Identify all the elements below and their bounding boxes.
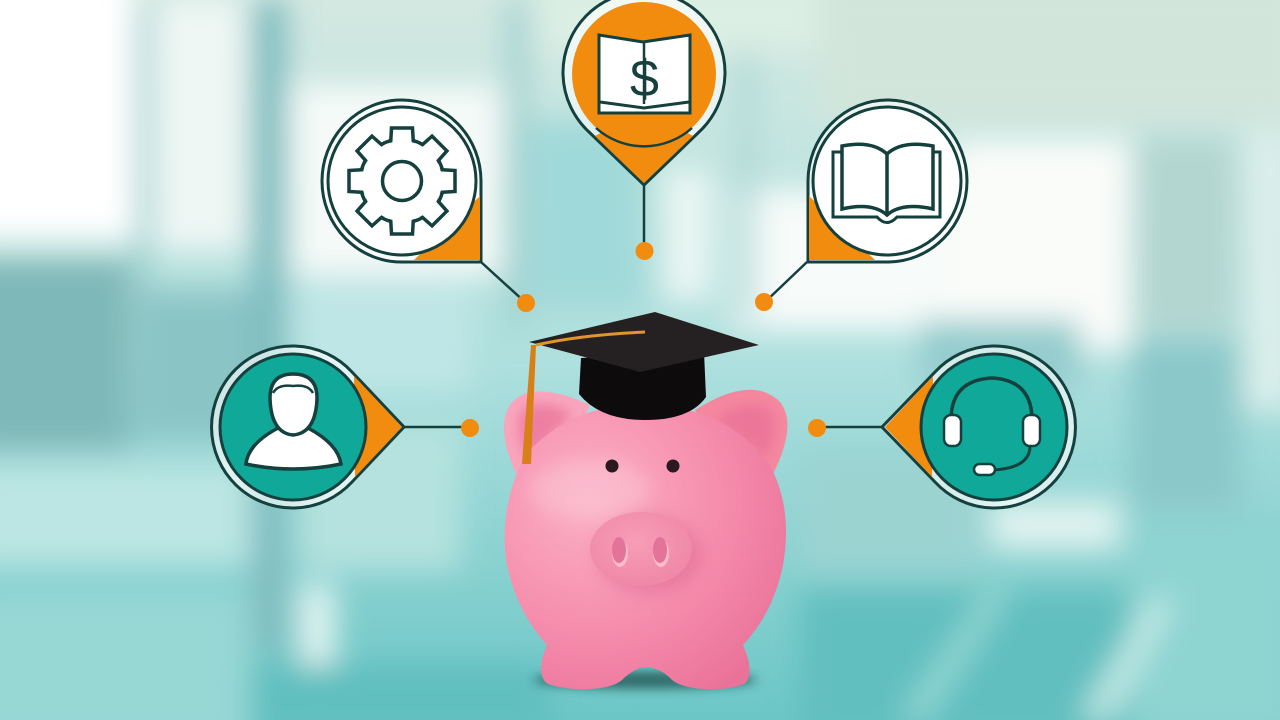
icon: person pin: [212, 346, 404, 508]
pig body: [505, 405, 786, 689]
icon: headset pin: [882, 346, 1075, 508]
connector lines: [404, 183, 882, 427]
graduation cap: [522, 312, 759, 464]
icon: gear pin: [322, 100, 481, 262]
gear: [349, 128, 455, 234]
connector dots: [461, 242, 826, 437]
pig snout: [590, 512, 702, 593]
icon: dollar book pin: [563, 0, 725, 185]
pig shadow: [533, 671, 757, 689]
pig ears: [504, 390, 787, 482]
pig highlight: [530, 460, 650, 520]
piggy bank with graduation cap: [504, 312, 787, 689]
pig eyes: [606, 460, 680, 472]
icon: open book pin: [808, 100, 967, 262]
icon: dollar book pin: $: [630, 50, 659, 108]
